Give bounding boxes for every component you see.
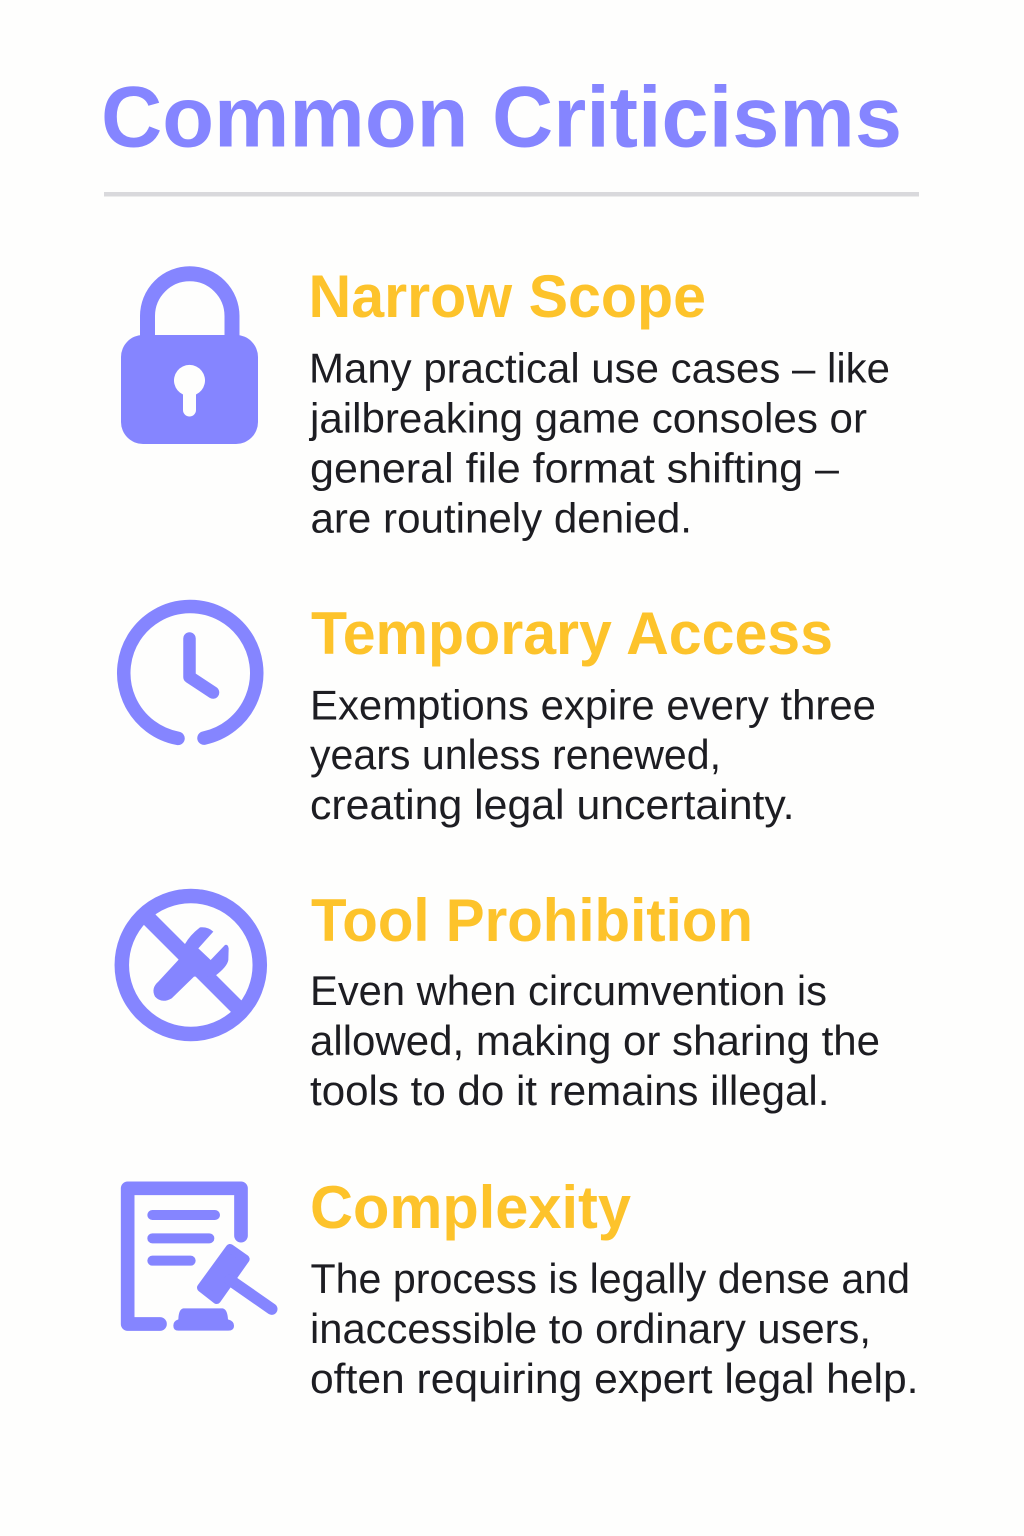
icon: prohibited tool xyxy=(122,896,260,1034)
text: narrow scope description: jailbreaking game consoles or xyxy=(308,394,867,442)
panel: tool prohibition xyxy=(122,887,880,1114)
heading: complexity: Complexity xyxy=(310,1174,632,1241)
text: tool prohibition description xyxy=(310,967,880,1114)
text: complexity description: The process is legally dense and xyxy=(310,1255,910,1302)
panel: temporary access xyxy=(124,600,876,828)
text: complexity description xyxy=(310,1255,919,1402)
text: temporary access description xyxy=(310,682,876,828)
heading: tool prohibition: Tool Prohibition xyxy=(311,887,753,954)
heading: narrow scope: Narrow Scope xyxy=(308,263,706,330)
text: narrow scope description xyxy=(308,344,890,542)
icon: padlock xyxy=(121,274,258,444)
panel: narrow scope xyxy=(121,263,890,542)
text: tool prohibition description: tools to do it remains illegal. xyxy=(310,1067,829,1114)
icon: document and gavel xyxy=(128,1188,272,1331)
text: temporary access description: Exemptions expire every three xyxy=(310,682,876,728)
title: Common Criticisms xyxy=(101,70,902,166)
heading: temporary access: Temporary Access xyxy=(311,600,833,667)
text: complexity description: inaccessible to ordinary users, xyxy=(310,1305,871,1352)
text: temporary access description: years unless renewed, xyxy=(310,731,721,778)
text: narrow scope description: general file format shifting – xyxy=(310,444,840,492)
icon: clock xyxy=(124,607,257,738)
text: narrow scope description: Many practical use cases – like xyxy=(309,344,890,392)
text: temporary access description: creating legal uncertainty. xyxy=(310,781,794,828)
panel: complexity xyxy=(128,1174,919,1402)
text: complexity description: often requiring expert legal help. xyxy=(310,1355,919,1402)
text: tool prohibition description: allowed, making or sharing the xyxy=(310,1017,880,1064)
text: narrow scope description: are routinely denied. xyxy=(310,494,692,542)
text: tool prohibition description: Even when circumvention is xyxy=(310,967,827,1014)
